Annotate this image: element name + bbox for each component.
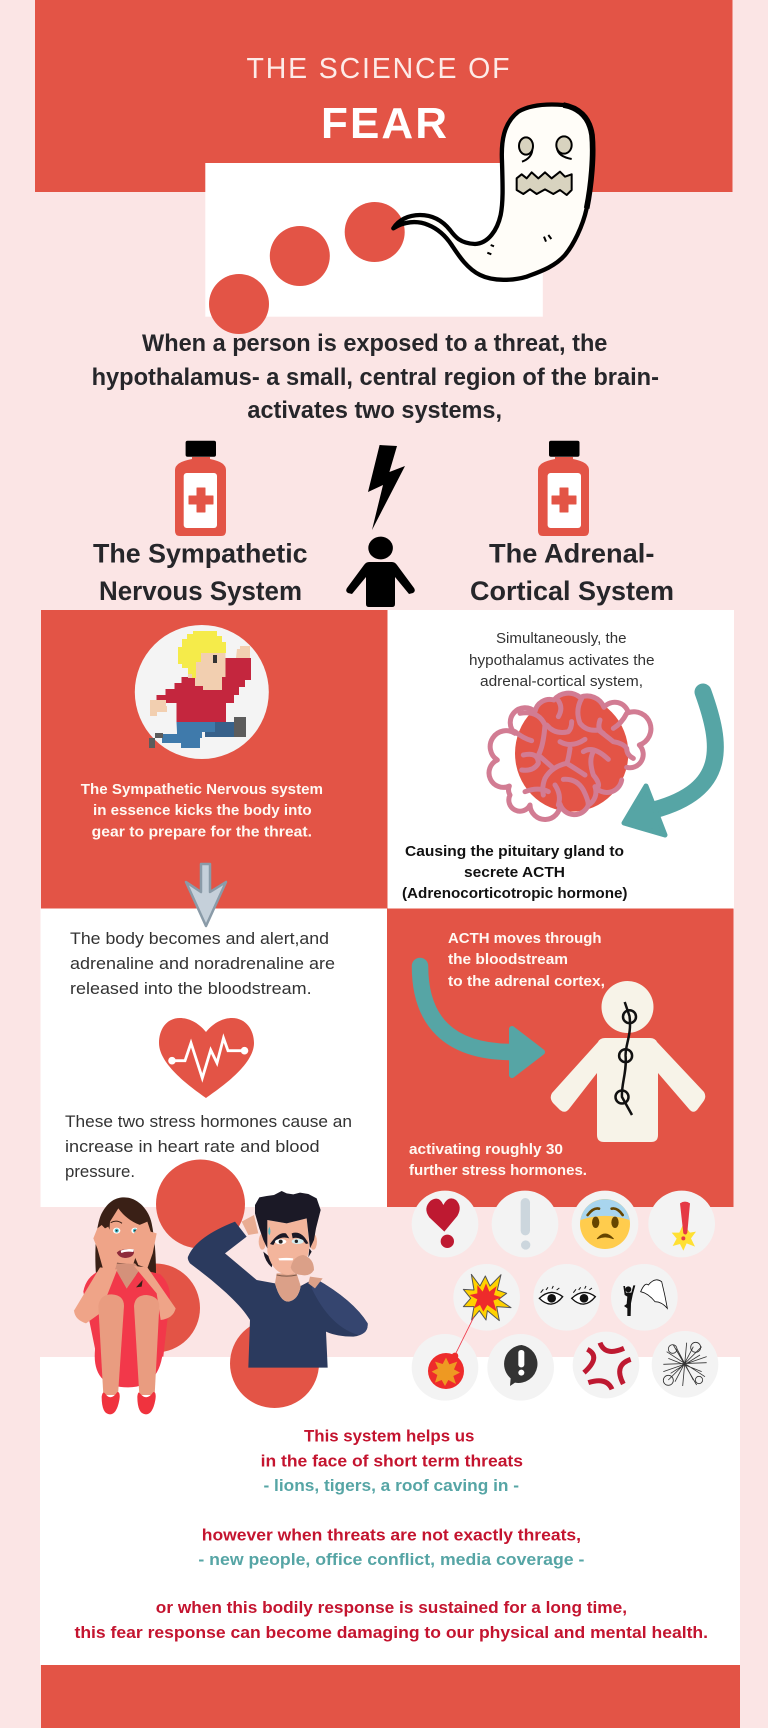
title: fear: FEAR	[321, 99, 447, 148]
text block: sympathetic explanation	[81, 782, 323, 841]
arrow: grey downward	[186, 864, 226, 926]
text block: adrenaline: adrenaline and noradrenaline are	[70, 954, 335, 973]
icon: left medicine bottle	[175, 441, 226, 536]
text block: introduction	[92, 330, 659, 424]
text block: ACTH moves	[448, 931, 605, 990]
icon: watching eyes	[533, 1264, 600, 1331]
text block: sympathetic explanation: in essence kicks the body into	[93, 803, 312, 819]
emoji icon cluster	[412, 1191, 718, 1401]
text block: conclusion: or when this bodily response is sustained for a long time,	[156, 1598, 627, 1617]
icon: red exclamation burst	[648, 1191, 715, 1257]
icon: heart exclamation	[412, 1191, 478, 1257]
icon: person scared by ghost	[611, 1264, 678, 1331]
footer band	[41, 1665, 740, 1728]
text block: activating hormones	[409, 1142, 587, 1179]
text block: conclusion	[74, 1427, 708, 1642]
icon: right medicine bottle	[538, 441, 589, 536]
text block: stress hormones	[65, 1112, 352, 1181]
panel: adrenal-cortical system	[388, 610, 734, 909]
decorative red circles behind people	[111, 1160, 319, 1408]
heading: sympathetic nervous system: The Sympathetic	[93, 539, 308, 569]
illustration: anxious man	[188, 1191, 368, 1368]
text block: introduction: activates two systems,	[247, 397, 502, 424]
text block: conclusion: This system helps us	[304, 1427, 474, 1446]
text block: sympathetic explanation: The Sympathetic Nervous system	[81, 782, 323, 798]
icon: bomb	[412, 1317, 478, 1401]
text block: stress hormones: increase in heart rate and blood	[65, 1137, 320, 1156]
panel: sympathetic nervous system	[41, 610, 388, 909]
illustration: frightened woman	[74, 1197, 176, 1414]
icon: body with nerves	[551, 981, 705, 1142]
text block: ACTH moves: the bloodstream	[448, 952, 568, 968]
text block: simultaneously	[469, 630, 654, 690]
panel: white ghost card	[205, 163, 543, 317]
text block: activating hormones: activating roughly 30	[409, 1142, 563, 1158]
heading: adrenal-cortical system: The Adrenal-	[489, 539, 654, 569]
text block: simultaneously: adrenal-cortical system,	[480, 673, 643, 690]
icon: brain	[489, 693, 651, 820]
icon: heart with pulse	[159, 1018, 254, 1098]
text block: adrenaline	[70, 929, 335, 998]
icon: running pixel man	[135, 625, 269, 759]
heading: sympathetic nervous system	[93, 539, 308, 606]
text block: pituitary gland	[402, 844, 628, 902]
icon: explosion with fuse	[453, 1264, 520, 1331]
text block: simultaneously: hypothalamus activates the	[469, 652, 654, 669]
text block: pituitary gland: Causing the pituitary gland to	[405, 844, 624, 860]
text block: conclusion: - new people, office conflict, media coverage -	[198, 1550, 584, 1569]
text block: stress hormones: pressure.	[65, 1162, 135, 1181]
panel: header banner	[35, 0, 732, 192]
text block: adrenaline: The body becomes and alert,and	[70, 929, 329, 948]
icon: grey exclamation	[492, 1191, 558, 1257]
panel: ACTH	[387, 908, 734, 1207]
icon: exclamation speech bubble	[487, 1334, 554, 1401]
arrow: teal curved right	[420, 966, 542, 1075]
icon: sketched burst	[652, 1331, 718, 1398]
text block: simultaneously: Simultaneously, the	[496, 630, 626, 647]
heading: adrenal-cortical system: Cortical System	[470, 576, 674, 606]
text block: conclusion: this fear response can become damaging to our physical and mental health.	[74, 1623, 708, 1642]
text block: stress hormones: These two stress hormones cause an	[65, 1112, 352, 1131]
panel: body becomes alert	[40, 908, 388, 1207]
text block: introduction: hypothalamus- a small, central region of the brain-	[92, 364, 659, 391]
text block: ACTH moves: ACTH moves through	[448, 931, 602, 947]
icon: lightning bolt	[368, 445, 405, 530]
icon: person	[346, 537, 415, 607]
text block: ACTH moves: to the adrenal cortex,	[448, 974, 605, 990]
text block: adrenaline: released into the bloodstream.	[70, 979, 312, 998]
text block: conclusion: however when threats are not exactly threats,	[202, 1526, 581, 1545]
text block: introduction: When a person is exposed to a threat, the	[142, 330, 607, 357]
icon: ghost	[393, 105, 593, 280]
text block: activating hormones: further stress hormones.	[409, 1163, 587, 1179]
panel: conclusion background	[40, 1357, 740, 1665]
heading: sympathetic nervous system: Nervous System	[99, 576, 302, 606]
text block: pituitary gland: secrete ACTH	[464, 865, 565, 881]
text block: pituitary gland: (Adrenocorticotropic hormone)	[402, 886, 628, 902]
text block: conclusion: - lions, tigers, a roof caving in -	[264, 1476, 519, 1495]
ghost trail circles	[209, 202, 405, 334]
text block: sympathetic explanation: gear to prepare for the threat.	[92, 825, 312, 841]
title: the science of: THE SCIENCE OF	[246, 53, 510, 85]
heading: adrenal-cortical system	[470, 539, 674, 606]
icon: anger symbol	[573, 1332, 639, 1398]
icon: fearful face emoji	[572, 1191, 638, 1257]
text block: conclusion: in the face of short term threats	[261, 1452, 523, 1471]
arrow: teal curved down-left	[624, 692, 715, 835]
